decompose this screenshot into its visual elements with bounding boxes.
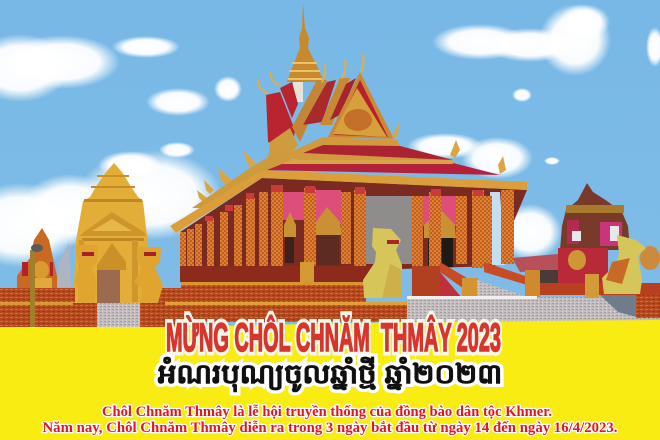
left brick wall: [0, 288, 183, 327]
description text: Năm nay, Chôl Chnăm Thmây diễn ra trong 3 ngày bắt đầu từ ngày 14 đến ngày 16/4/2023.: [42, 420, 618, 436]
columns: [180, 186, 514, 278]
description text: Chôl Chnăm Thmây là lễ hội truyền thống của đồng bào dân tộc Khmer.: [102, 404, 552, 420]
grey central wall: [362, 196, 416, 264]
front gable: [328, 72, 394, 139]
right small tower: [558, 183, 630, 284]
Khmer subtitle: [154, 353, 504, 396]
yellow band: [0, 320, 660, 440]
pink walls: [283, 190, 456, 226]
right lion statue: [602, 235, 646, 294]
terrace balustrade: [165, 262, 440, 322]
spire: [287, 2, 324, 102]
stacked rear roofs: [266, 78, 356, 160]
column capitals: [205, 185, 483, 221]
grey distant stupa: [57, 243, 71, 287]
gate door: [97, 270, 120, 303]
left gate lions: [74, 245, 163, 303]
door arches: [284, 207, 456, 238]
main roof tiers: [260, 137, 500, 175]
gate stairs and plinths: [73, 303, 164, 327]
stairway balustrades: [440, 262, 540, 299]
title: MỪNG CHÔL CHNĂM THMÂY 2023: [166, 316, 501, 360]
main pagoda: [165, 2, 540, 322]
golden gate tower: [73, 163, 148, 303]
description text: [42, 404, 618, 436]
Khmer subtitle: អំណរបុណ្យចូលឆ្នាំថ្មី ឆ្នាំ២០២៣: [158, 359, 502, 389]
back wall: [180, 178, 527, 276]
right temple plinth and stairs: [407, 294, 660, 321]
doors: [285, 235, 453, 267]
central lion statue: [363, 228, 402, 298]
Khmer subtitle: អំណរបុណ្យចូលឆ្នាំថ្មី ឆ្នាំ២០២៣: [158, 359, 502, 389]
clouds: [0, 4, 660, 267]
side roof: [192, 150, 292, 208]
right balustrade: [540, 246, 660, 298]
title: MỪNG CHÔL CHNĂM THMÂY 2023: [166, 316, 501, 360]
sky gap right: [490, 192, 505, 265]
eave finials: [197, 122, 506, 202]
left small tower: [17, 228, 57, 290]
distant building with pink roof: [484, 222, 561, 284]
main eave: [170, 170, 527, 233]
roof finials: [258, 55, 364, 93]
lamp post: [30, 244, 43, 327]
